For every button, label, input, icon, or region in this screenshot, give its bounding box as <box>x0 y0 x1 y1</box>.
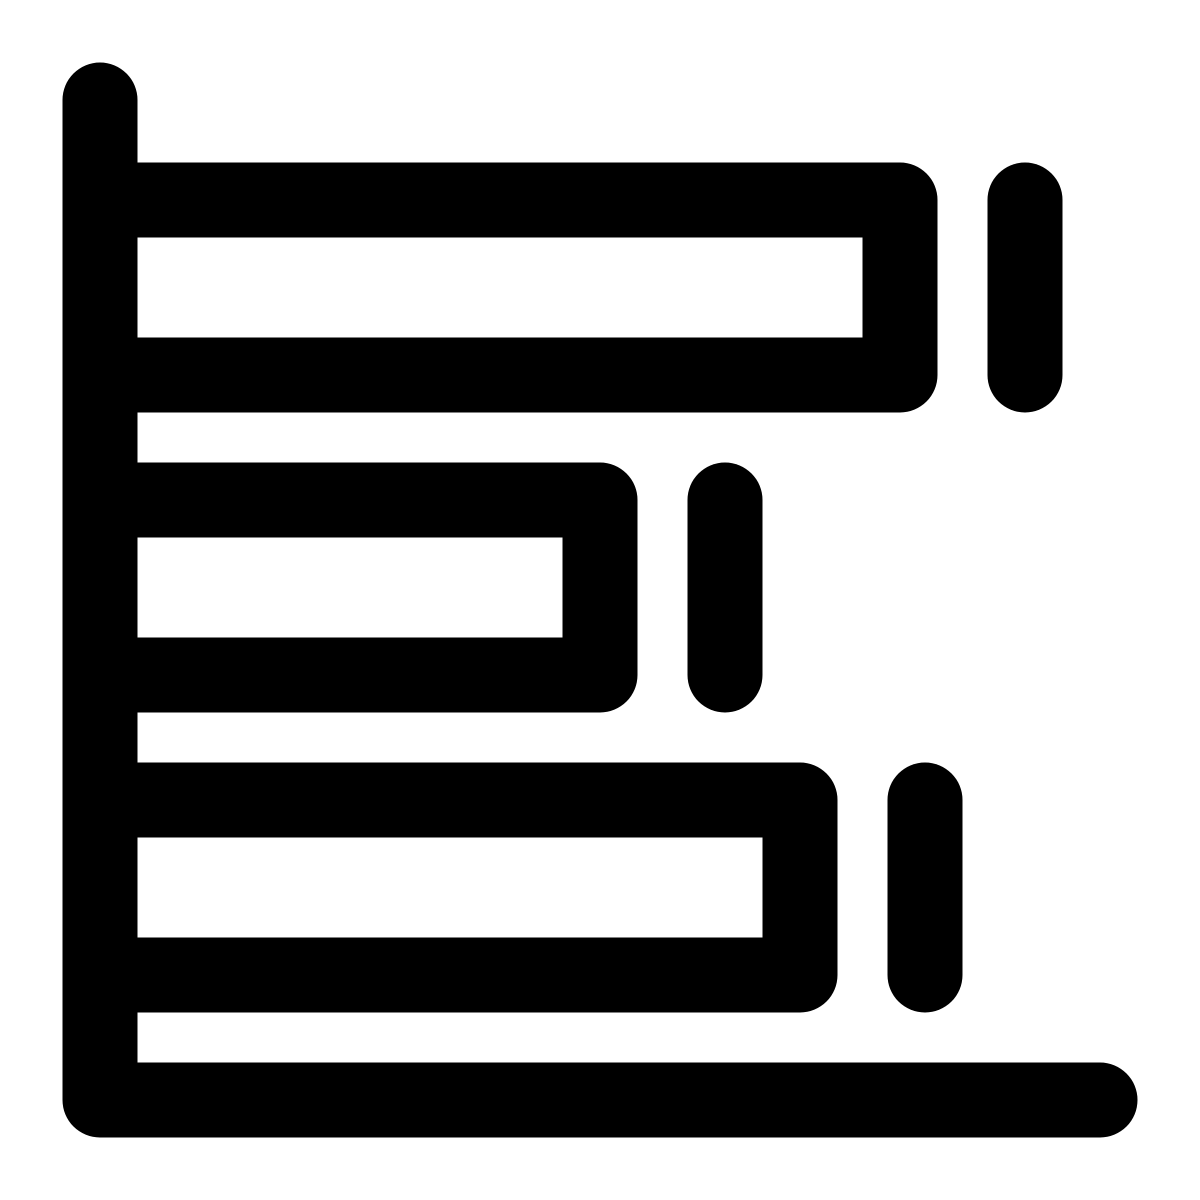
bar 3 <box>100 800 800 975</box>
bar 2 <box>100 500 600 675</box>
axes <box>100 100 1100 1100</box>
bar 1 tick <box>988 200 1062 375</box>
bar 3 tick <box>888 800 962 975</box>
bar 2 tick <box>688 500 762 675</box>
bar 1 <box>100 200 900 375</box>
